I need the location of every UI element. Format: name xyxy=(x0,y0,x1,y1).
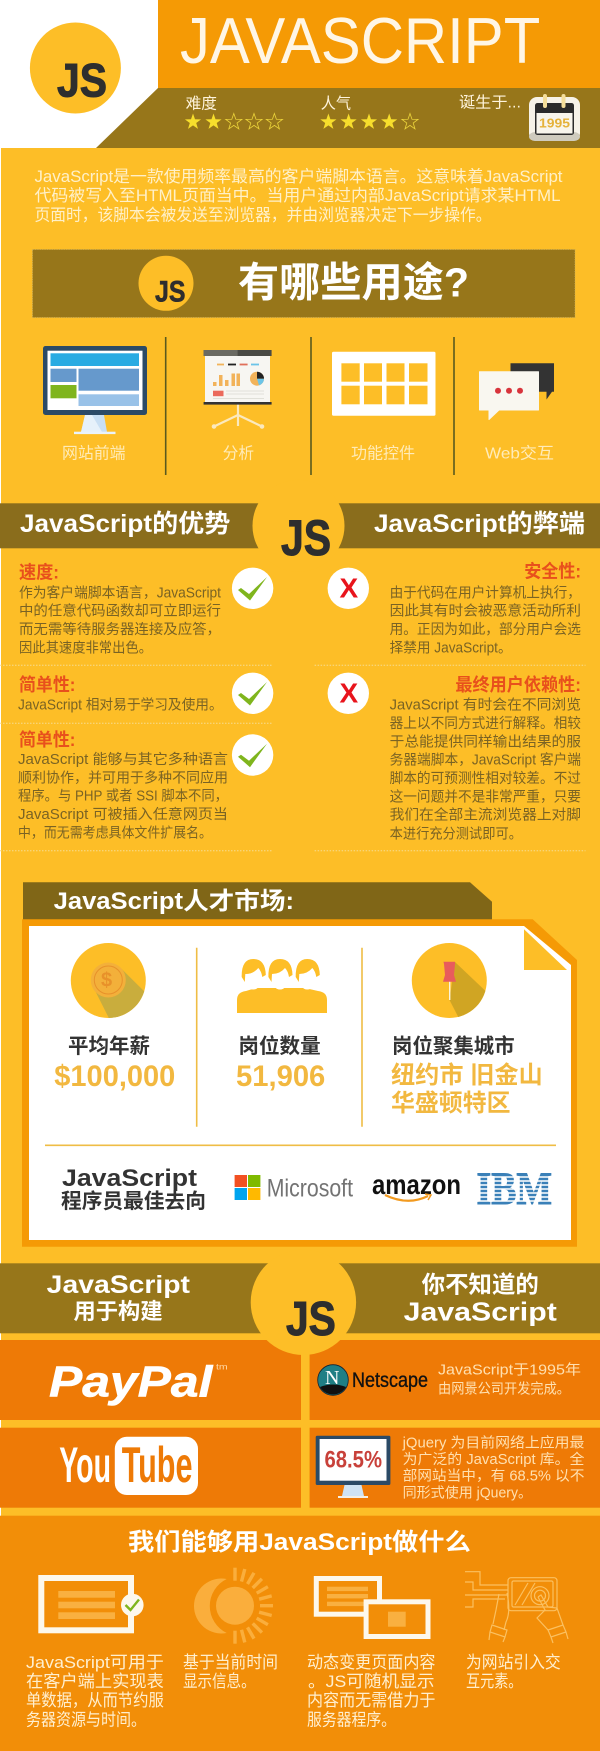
panel: con dependence xyxy=(328,673,581,842)
panel: PayPal xyxy=(0,1340,301,1420)
panel: pro speed xyxy=(19,563,273,656)
stat: salary xyxy=(54,943,180,1093)
JS logo circle xyxy=(30,22,121,114)
panel: pro speed: 作为客户端脚本语言，JavaScript xyxy=(19,584,221,601)
panel: con dependence: 这一问题并不是非常严重，只要 xyxy=(390,788,581,805)
intro text: JavaScript是一款使用频率最高的客户端脚本语言。这意味着JavaScript xyxy=(34,167,563,186)
JS logo circle: JS xyxy=(57,55,107,107)
panel: YouTube: Tube xyxy=(122,1437,192,1493)
panel: jQuery fact xyxy=(310,1428,600,1508)
text: interaction xyxy=(466,1653,561,1691)
difficulty rating xyxy=(185,94,282,129)
icon: presentation board xyxy=(204,350,272,428)
stat: job count: 51,906 xyxy=(236,1060,325,1093)
stat: cities: 纽约市 旧金山 xyxy=(391,1061,543,1089)
icon: calendar xyxy=(529,94,580,141)
panel: pro compatibility: 顺利协作，并可用于多种不同应用 xyxy=(18,768,228,786)
panel: con security: 因此其有时会被恶意活动所利 xyxy=(390,602,581,620)
label: widgets: 功能控件 xyxy=(351,444,415,462)
icon: touch interaction xyxy=(465,1572,568,1643)
panel: Netscape fact: Netscape xyxy=(352,1369,428,1392)
panel: pro speed: 速度: xyxy=(19,563,59,583)
panel: pro simplicity xyxy=(18,673,273,714)
panel: con security: 用。正因为如此，部分用户会选 xyxy=(390,621,581,638)
icon: widgets grid xyxy=(332,352,436,416)
intro text: 代码被写入至HTML页面当中。当用户通过内部JavaScript请求某HTML xyxy=(34,187,560,205)
popularity rating: 人气 xyxy=(321,94,351,112)
pros and cons header: JS xyxy=(281,510,331,566)
employers heading: JavaScript xyxy=(62,1165,197,1192)
panel: Netscape fact: N xyxy=(325,1367,339,1389)
panel: con dependence: JavaScript 有时会在不同浏览 xyxy=(390,697,581,714)
heading tab: JavaScript人才市场: xyxy=(54,888,294,915)
panel: Netscape fact: JavaScript于1995年 xyxy=(438,1362,581,1379)
employers heading xyxy=(61,1165,206,1213)
logo: amazon: amazon xyxy=(372,1169,461,1200)
section header: built with / did you know: 用于构建 xyxy=(74,1299,163,1324)
panel: Netscape fact: 由网景公司开发完成。 xyxy=(438,1380,570,1397)
panel: jQuery fact: 68.5% xyxy=(324,1446,382,1474)
panel: YouTube: You xyxy=(59,1437,111,1493)
employers heading: 程序员最佳去向 xyxy=(61,1189,206,1213)
icon: check xyxy=(232,568,273,609)
panel: pro compatibility: 中，而无需考虑具体文件扩展名。 xyxy=(18,824,212,841)
icon: form xyxy=(41,1578,144,1630)
header banner xyxy=(0,0,600,148)
panel: pro compatibility: 程序。与 PHP 或者 SSI 脚本不同， xyxy=(18,788,228,805)
logo: IBM: IBM xyxy=(476,1163,552,1215)
JS badge: JS xyxy=(286,1293,336,1346)
pros and cons header: JavaScript的弊端 xyxy=(374,510,585,538)
panel: con dependence: 本进行充分测试即可。 xyxy=(390,825,522,842)
intro text xyxy=(34,167,563,224)
logo: Microsoft: Microsoft xyxy=(267,1174,353,1202)
icon: cross xyxy=(328,673,369,714)
panel: pro compatibility: JavaScript 可被插入任意网页当 xyxy=(18,805,228,823)
text: interaction: 为网站引入交 xyxy=(466,1653,561,1672)
panel: con security: 安全性: xyxy=(524,561,581,582)
panel: job market xyxy=(22,882,577,1247)
logo: Microsoft xyxy=(235,1174,353,1202)
panel: pro simplicity: 简单性: xyxy=(19,674,75,695)
panel: YouTube xyxy=(0,1428,301,1508)
panel: con security: 择禁用 JavaScript。 xyxy=(390,639,512,656)
icon: check xyxy=(232,734,273,776)
title: JAVASCRIPT xyxy=(180,5,540,78)
panel: pro compatibility xyxy=(18,729,273,841)
text: time xyxy=(183,1653,278,1691)
pros and cons header: JavaScript的优势 xyxy=(20,510,230,538)
JS badge xyxy=(251,1250,356,1355)
panel: con dependence: 最终用户依赖性: xyxy=(455,674,581,695)
panel: con dependence: 于总能提供同样输出结果的服 xyxy=(390,733,581,750)
text: dynamic content xyxy=(307,1653,436,1730)
stat: cities: 华盛顿特区 xyxy=(391,1090,510,1117)
panel: pro compatibility: JavaScript 能够与其它多种语言 xyxy=(18,750,228,768)
panel: pro speed: 因此其速度非常出色。 xyxy=(19,639,152,656)
panel: con dependence: 我们在全部主流浏览器上对脚 xyxy=(390,806,581,824)
text: forms xyxy=(26,1653,164,1730)
born in: 诞生于... xyxy=(459,94,521,112)
text: forms: 在客户端上实现表 xyxy=(26,1672,164,1691)
icon: check xyxy=(232,673,273,714)
stat: cities: 岗位聚集城市 xyxy=(392,1034,515,1058)
text: time: 基于当前时间 xyxy=(183,1653,278,1672)
stat: job count xyxy=(236,959,327,1093)
text: dynamic content: 服务器程序。 xyxy=(307,1710,396,1730)
icon: website monitor xyxy=(43,346,147,434)
stat: salary: 平均年薪 xyxy=(68,1035,150,1058)
icon: windows xyxy=(316,1578,428,1636)
section header: built with / did you know xyxy=(0,1263,600,1333)
pros and cons header xyxy=(0,480,600,572)
text: time: 显示信息。 xyxy=(183,1672,256,1691)
section header: built with / did you know: JavaScript xyxy=(404,1297,557,1327)
text: interaction: 互元素。 xyxy=(466,1672,522,1691)
section heading: uses: JS xyxy=(155,274,185,308)
text: forms: 单数据，从而节约服 xyxy=(26,1691,164,1710)
heading: 我们能够用JavaScript做什么 xyxy=(128,1529,471,1556)
panel: jQuery fact: 部网站当中，有 68.5% 以不 xyxy=(403,1468,584,1485)
icon: calendar: 1995 xyxy=(539,116,570,130)
panel: con dependence: 器上以不同方式进行解释。相较 xyxy=(390,714,581,732)
intro text: 页面时，该脚本会被发送至浏览器，并由浏览器决定下一步操作。 xyxy=(34,206,492,224)
section heading: uses xyxy=(32,250,575,318)
section header: built with / did you know: 你不知道的 xyxy=(422,1271,539,1297)
text: dynamic content: 动态变更页面内容 xyxy=(307,1653,436,1672)
text: forms: JavaScript可用于 xyxy=(26,1653,164,1672)
section header: built with / did you know: JavaScript xyxy=(47,1271,191,1299)
icon: chat bubbles xyxy=(480,363,554,420)
stat: salary: $ xyxy=(101,970,112,992)
panel: jQuery fact: 同形式使用 jQuery。 xyxy=(403,1484,532,1501)
panel: what can we do xyxy=(0,1516,600,1751)
panel: pro simplicity: JavaScript 相对易于学习及使用。 xyxy=(18,696,223,713)
stat: job count: 岗位数量 xyxy=(238,1034,321,1058)
panel: pro speed: 而无需等待服务器连接及应答， xyxy=(19,620,221,638)
panel: jQuery fact: jQuery 为目前网络上应用最 xyxy=(402,1433,584,1451)
difficulty rating: 难度 xyxy=(186,94,217,112)
panel: con dependence: 务器端脚本，JavaScript 客户端 xyxy=(390,752,581,769)
text: forms: 务器资源与时间。 xyxy=(26,1710,146,1730)
popularity rating xyxy=(320,94,418,129)
label: web interaction: Web交互 xyxy=(485,444,554,462)
section heading: uses: 有哪些用途? xyxy=(238,260,469,306)
icon: cross: X xyxy=(340,678,358,708)
label: analytics: 分析 xyxy=(223,444,254,462)
stat: cities xyxy=(391,943,543,1117)
panel: con security: 由于代码在用户计算机上执行， xyxy=(390,584,581,601)
panel: PayPal: tm xyxy=(216,1362,228,1372)
panel: jQuery fact: 为广泛的 JavaScript 库。全 xyxy=(403,1450,585,1468)
heading tab xyxy=(23,882,492,920)
panel: Netscape fact xyxy=(310,1340,600,1420)
icon: cross xyxy=(328,568,369,609)
text: dynamic content: 内容而无需借力于 xyxy=(307,1691,436,1710)
panel: con dependence: 脚本的可预测性相对较差。不过 xyxy=(390,769,581,787)
text: dynamic content: 。JS可随机显示 xyxy=(308,1672,434,1691)
panel: con security xyxy=(328,561,581,656)
label: front end: 网站前端 xyxy=(62,444,126,462)
icon: cross: X xyxy=(340,572,358,604)
icon: sun and moon xyxy=(194,1568,273,1644)
panel: pro compatibility: 简单性: xyxy=(19,729,75,750)
panel: pro speed: 中的任意代码函数却可立即运行 xyxy=(19,602,221,620)
stat: salary: $100,000 xyxy=(54,1060,175,1093)
panel: PayPal: PayPal xyxy=(49,1358,213,1406)
